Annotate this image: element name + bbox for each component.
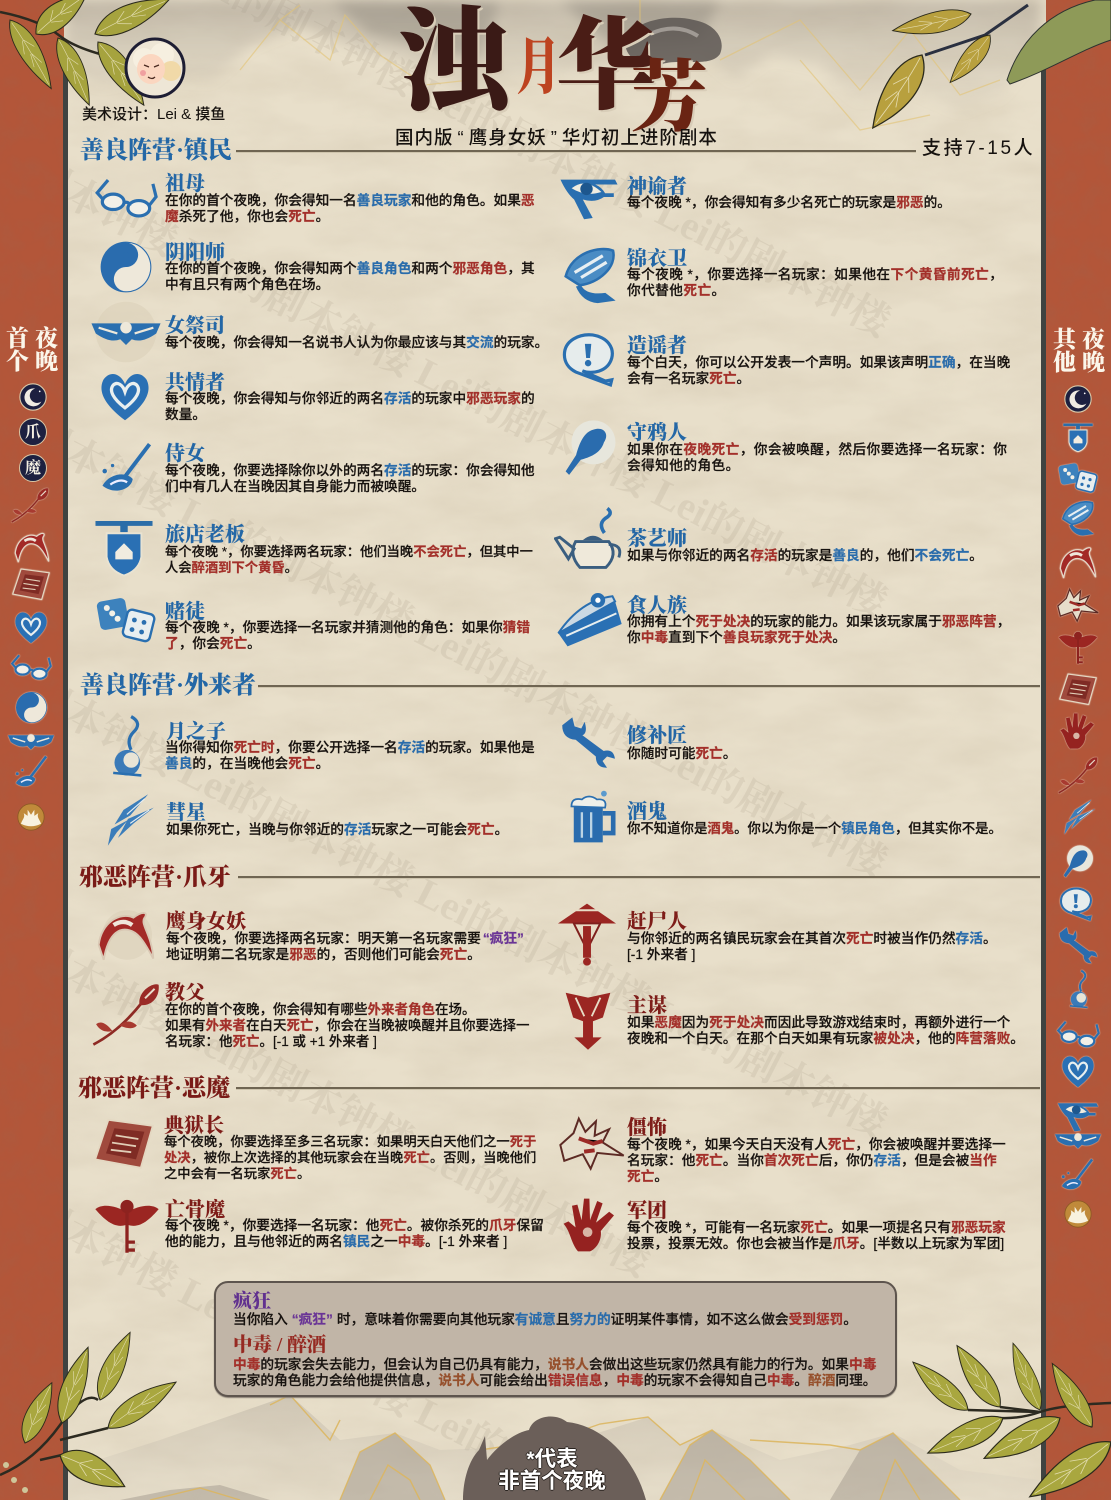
ability: 每个夜晚，你要选择两名玩家：明天第一名玩家需要“疯狂” [166,931,524,946]
footer blob [455,1410,655,1500]
icon: demon marker [19,454,47,482]
role: 赌徒 [96,598,530,651]
icon: yin yang [15,691,48,724]
label: 首个夜晚: 个 [6,349,29,374]
name: 赶尸人 [627,911,687,933]
leaves: top left [0,0,170,106]
role: 阴阳师 [100,242,535,292]
role: 亡骨魔 [90,1198,550,1258]
icon: minion marker: 爪 [25,419,41,442]
right order column: other nights [1046,320,1111,1230]
icon: eye [1056,1090,1100,1134]
ability: 死亡。 [627,1169,668,1184]
icon: winged sun [92,302,160,362]
icon: moon pendant [1058,969,1098,1009]
leaves: bottom right [905,1340,1111,1500]
ability: 在你的首个夜晚，你会得知有哪些外来者角色在场。 [165,1002,476,1017]
label: 其他夜晚: 夜 [1082,327,1105,352]
ability: 名玩家：他死亡。[-1 或 +1 外来者 ] [165,1034,377,1049]
label: 首个夜晚: 首 [6,326,29,351]
name: 共情者 [165,372,225,394]
icon: book [12,566,50,604]
role: 茶艺师 [553,527,1013,565]
role: 月之子 [90,720,550,778]
icon: maze book [94,1115,154,1175]
ability [165,620,530,651]
ability [627,355,1010,387]
bottom mountains [66,1395,1040,1500]
icon: dice [96,598,156,642]
icon: moon pendant [94,714,158,778]
left order column: first night [0,320,64,835]
icon: winged sun [7,717,55,765]
icon: winged key [94,1192,160,1258]
icon: dusk [1064,1200,1092,1228]
icon: glasses [10,646,52,688]
heading: 善良阵营·镇民: 善良阵营·镇民 [80,138,232,164]
name: 教父 [165,982,205,1004]
ability: [-1 外来者 ] [627,947,695,962]
name: 典狱长 [164,1115,224,1137]
label: 首个夜晚: 夜 [35,326,58,351]
icon: eye [560,180,618,220]
icon: book [1059,671,1097,709]
icon: glasses [95,179,158,218]
icon: bursting hand [1057,585,1099,627]
definition: 疯狂: 当你陷入 “疯狂” 时，意味着你需要向其他玩家有诚意且努力的证明某件事情，如不这么做会受到惩罚。 [233,1312,857,1327]
icon: comet [1059,798,1097,836]
icon: harpy [95,904,157,966]
ability: 你不知道你是酒鬼。你以为你是一个镇民角色，但其实你不是。 [627,821,1002,836]
ink cloud behind title [626,18,722,64]
heading: 善良阵营·外来者: 善良阵营·外来者 [80,673,256,699]
ability: 他的能力，且与他邻近的两名镇民之一中毒。[-1 外来者 ] [165,1234,507,1249]
leaves: bottom left [0,1330,185,1500]
ability: 在你的首个夜晚，你会得知两个善良角色和两个邪恶角色，其 [165,261,535,276]
icon: winged key [1058,627,1098,667]
role: 祖母 [95,172,535,224]
icon: pie [557,587,623,653]
footnote [470,1448,634,1492]
icon: yin yang [100,242,152,292]
role: 赶尸人 [553,910,1013,966]
ability [165,1218,544,1250]
icon: heart [13,609,49,645]
role: 守鸦人 [553,421,1013,475]
name: 彗星 [166,802,206,824]
definition: 中毒 / 醉酒 [233,1357,876,1389]
icon: rose [11,487,49,525]
ability: 了，你会死亡。 [165,636,261,651]
icon: tassel medallion [564,248,616,304]
role: 僵怖 [553,1116,1013,1186]
icon: speech bubble [558,326,622,390]
ability [627,1137,1006,1185]
ability: 你中毒直到下个善良玩家死于处决。 [627,630,846,645]
ability: 之中会有一名玩家死亡。 [164,1166,310,1181]
label: 首个夜晚: 晚 [35,349,58,374]
ability [627,1220,1006,1252]
ability: 每个夜晚 *，如果今天白天没有人死亡，你会被唤醒并要选择一 [627,1137,1006,1152]
ability [165,261,535,292]
icon: heart [1060,1053,1096,1089]
icon: dice [1058,458,1098,498]
ability: 数量。 [165,407,206,422]
ability: 每个夜晚 *，你要选择一名玩家并猜测他的角色：如果你猜错 [165,620,530,635]
icon: ritual hat [554,901,620,967]
ability [627,442,1007,474]
role: 造谣者 [553,334,1013,388]
name: 旅店老板 [165,524,245,546]
ability: 如果有外来者在白天死亡，你会在当晚被唤醒并且你要选择一 [165,1018,530,1033]
ability: 会有一名玩家死亡。 [627,371,750,386]
icon: inn sign [96,521,152,576]
ability: 如果恶魔因为死于处决而因此导致游戏结束时，再额外进行一个 [627,1015,1010,1030]
role: 典狱长 [90,1114,550,1182]
ability: 每个夜晚，你要选择除你以外的两名存活的玩家：你会得知他 [165,463,535,478]
name: 赌徒 [165,601,205,623]
ability [164,1134,536,1182]
ability: 如果你在夜晚死亡，你会被唤醒，然后你要选择一名玩家：你 [627,442,1007,457]
icon: rose [1058,756,1098,796]
player count: 支持7-15人 [922,138,1035,159]
icon: speech bubble [1057,883,1097,923]
role: 锦衣卫 [564,248,1003,304]
icon: red hand [1058,711,1098,751]
ability: 魔杀死了他，你也会死亡。 [165,209,329,224]
icon: moon [19,383,47,411]
footnote: *代表 [526,1447,578,1471]
ability: 善良的，在当晚他会死亡。 [165,756,329,771]
avatar: sheep [124,38,186,98]
red side bars [0,0,64,1500]
icon: harpy [1058,542,1098,582]
ability: 每个白天，你可以公开发表一个声明。如果该声明正确，在当晚 [627,355,1010,370]
ability: 每个夜晚 *，你要选择一名玩家：他死亡。被你杀死的爪牙保留 [165,1218,544,1233]
name: 军团 [627,1200,667,1222]
name: 亡骨魔 [165,1199,225,1221]
ability: 每个夜晚 *，你要选择两名玩家：他们当晚不会死亡，但其中一 [165,544,533,559]
icon: heart [101,374,149,420]
icon: red hand [560,1195,620,1255]
ability [627,931,997,963]
role: 彗星 [90,801,550,848]
icon: raven [1061,844,1095,878]
icon: rose [92,982,160,1050]
icon: wrench [560,714,616,770]
icon: brush [13,755,49,791]
ability: 你代替他死亡。 [627,283,726,298]
heading: 邪恶阵营·爪牙: 邪恶阵营·爪牙 [79,865,231,891]
label: 其他夜晚 [1051,326,1107,374]
name: 修补匠 [627,725,687,747]
name: 神谕者 [627,176,687,198]
title: 浊月华芳 [398,1,708,141]
credit: art design: 美术设计：Lei & 摸鱼 [82,106,225,123]
ability: 你拥有上个死于处决的玩家的能力。如果该玩家属于邪恶阵营， [627,614,1010,629]
leaves and buds: top right [872,0,1111,130]
icon: brush [102,443,151,491]
ability: 在你的首个夜晚，你会得知一名善良玩家和他的角色。如果恶 [165,193,535,208]
term: 疯狂: 疯狂 [233,1291,271,1312]
role: 旅店老板 [96,521,533,576]
role: 教父 [90,981,550,1051]
name: 月之子 [166,721,226,743]
footnote: 非首个夜晚 [498,1469,606,1493]
ability: 每个夜晚，你会得知与你邻近的两名存活的玩家中邪恶玩家的 [165,391,535,406]
icon: glasses [1056,1012,1100,1056]
name: 女祭司 [165,315,225,337]
ability [166,931,526,963]
ability [165,463,535,494]
icon: harpy [13,528,51,566]
title: 浊月华芳: 芳 [630,54,708,141]
icon: minion marker [19,418,47,446]
ability [165,740,535,772]
name: 阴阳师 [165,242,225,264]
name: 守鸦人 [627,422,687,444]
title: 浊月华芳: 月 [516,34,561,102]
ability: 你随时可能死亡。 [627,746,737,761]
definition: 中毒 / 醉酒: 玩家的角色能力会给他提供信息，说书人可能会给出错误信息，中毒的玩家不会得知自己中毒。醉酒同理。 [233,1373,876,1388]
ability [165,391,535,422]
ability: 人会醉酒到下个黄昏。 [165,560,298,575]
label: 首个夜晚 [5,325,59,373]
term: 中毒 / 醉酒: 中毒 / 醉酒 [233,1335,326,1356]
role: 鹰身女妖 [90,910,550,966]
role: 军团 [553,1199,1013,1255]
role: 修补匠 [553,724,1013,770]
ability [165,1002,530,1050]
role: 女祭司 [92,302,548,362]
name: 锦衣卫 [627,248,687,270]
ability [165,193,535,224]
ability: 投票，投票无效。你也会被当作是爪牙。[半数以上玩家为军团] [627,1236,1004,1251]
title: 浊月华芳: 浊 [398,1,510,125]
definition: 中毒 / 醉酒: 中毒的玩家会失去能力，但会认为自己仍具有能力，说书人会做出这些玩家仍然具有能力的行为。如果中毒 [233,1357,876,1372]
subtitle: 国内版“鹰身女妖”华灯初上进阶剧本 [395,127,718,148]
icon: raven [561,418,619,476]
role: 食人族 [553,594,1013,648]
role: 侍女 [102,442,535,494]
icon: winged sun [1054,1116,1102,1164]
heading: 邪恶阵营·恶魔: 邪恶阵营·恶魔 [78,1076,230,1102]
title: 浊月华芳: 华 [556,11,656,122]
top mountains [66,0,1040,110]
ability [627,267,1003,298]
icon: inn sign [1062,421,1094,453]
ability: 们中有几人在当晚因其自身能力而被唤醒。 [165,479,425,494]
panel: glossary [214,1281,897,1397]
icon: bursting hand [559,1112,625,1178]
ability: 名玩家：他死亡。当你首次死亡后，你仍存活，但是会被当作 [627,1153,997,1168]
ability [165,544,533,575]
ability: 每个夜晚，你会得知一名说书人认为你最应该与其交流的玩家。 [165,335,548,350]
name: 酒鬼 [627,801,667,823]
ability: 每个夜晚，你要选择至多三名玩家：如果明天白天他们之一死于 [164,1134,536,1149]
ability: 每个夜晚 *，你会得知有多少名死亡的玩家是邪恶的。 [627,195,951,210]
ability: 会得知他的角色。 [627,458,740,473]
ability: 与你邻近的两名镇民玩家会在其首次死亡时被当作仍然存活。 [627,931,997,946]
name: 茶艺师 [627,528,687,550]
role: 神谕者 [560,176,951,220]
ability: 当你得知你死亡时，你要公开选择一名存活的玩家。如果他是 [165,740,535,755]
label: 其他夜晚: 晚 [1082,350,1105,375]
icon: brush [1059,1158,1095,1194]
icon: goblet [557,989,619,1051]
icon: wrench [1058,925,1098,965]
ability: 每个夜晚 *，可能有一名玩家死亡。如果一项提名只有邪恶玩家 [627,1220,1006,1235]
name: 食人族 [627,595,687,617]
icon: dusk [17,803,45,831]
ability: 如果与你邻近的两名存活的玩家是善良的，他们不会死亡。 [627,548,983,563]
icon: teapot [554,507,626,579]
name: 祖母 [165,173,205,195]
label: 其他夜晚: 他 [1053,350,1076,375]
icon: demon marker: 魔 [25,455,41,478]
icon: comet [100,792,156,848]
ability: 如果你死亡，当晚与你邻近的存活玩家之一可能会死亡。 [166,822,508,837]
ability: 每个夜晚 *，你要选择一名玩家：如果他在下个黄昏前死亡， [627,267,1003,282]
icon: moon [1064,385,1092,413]
ability: 夜晚和一个白天。在那个白天如果有玩家被处决，他的阵营落败。 [627,1031,1024,1046]
role: 主谋 [553,994,1013,1050]
name: 僵怖 [627,1117,667,1139]
role: 共情者 [101,372,535,422]
name: 鹰身女妖 [166,911,246,933]
ability [627,1015,1024,1047]
ability [627,614,1010,646]
icon: beer mug [561,789,619,847]
name: 侍女 [165,443,205,465]
icon: tassel medallion [1058,498,1098,538]
label: 其他夜晚: 其 [1053,327,1076,352]
name: 造谣者 [627,335,687,357]
ability: 中有且只有两个角色在场。 [165,277,329,292]
name: 主谋 [627,995,667,1017]
role: 酒鬼 [553,800,1013,847]
ability: 处决，被你上次选择的其他玩家会在当晚死亡。否则，当晚他们 [164,1150,536,1165]
ability: 地证明第二名玩家是邪恶的，否则他们可能会死亡。 [166,947,481,962]
